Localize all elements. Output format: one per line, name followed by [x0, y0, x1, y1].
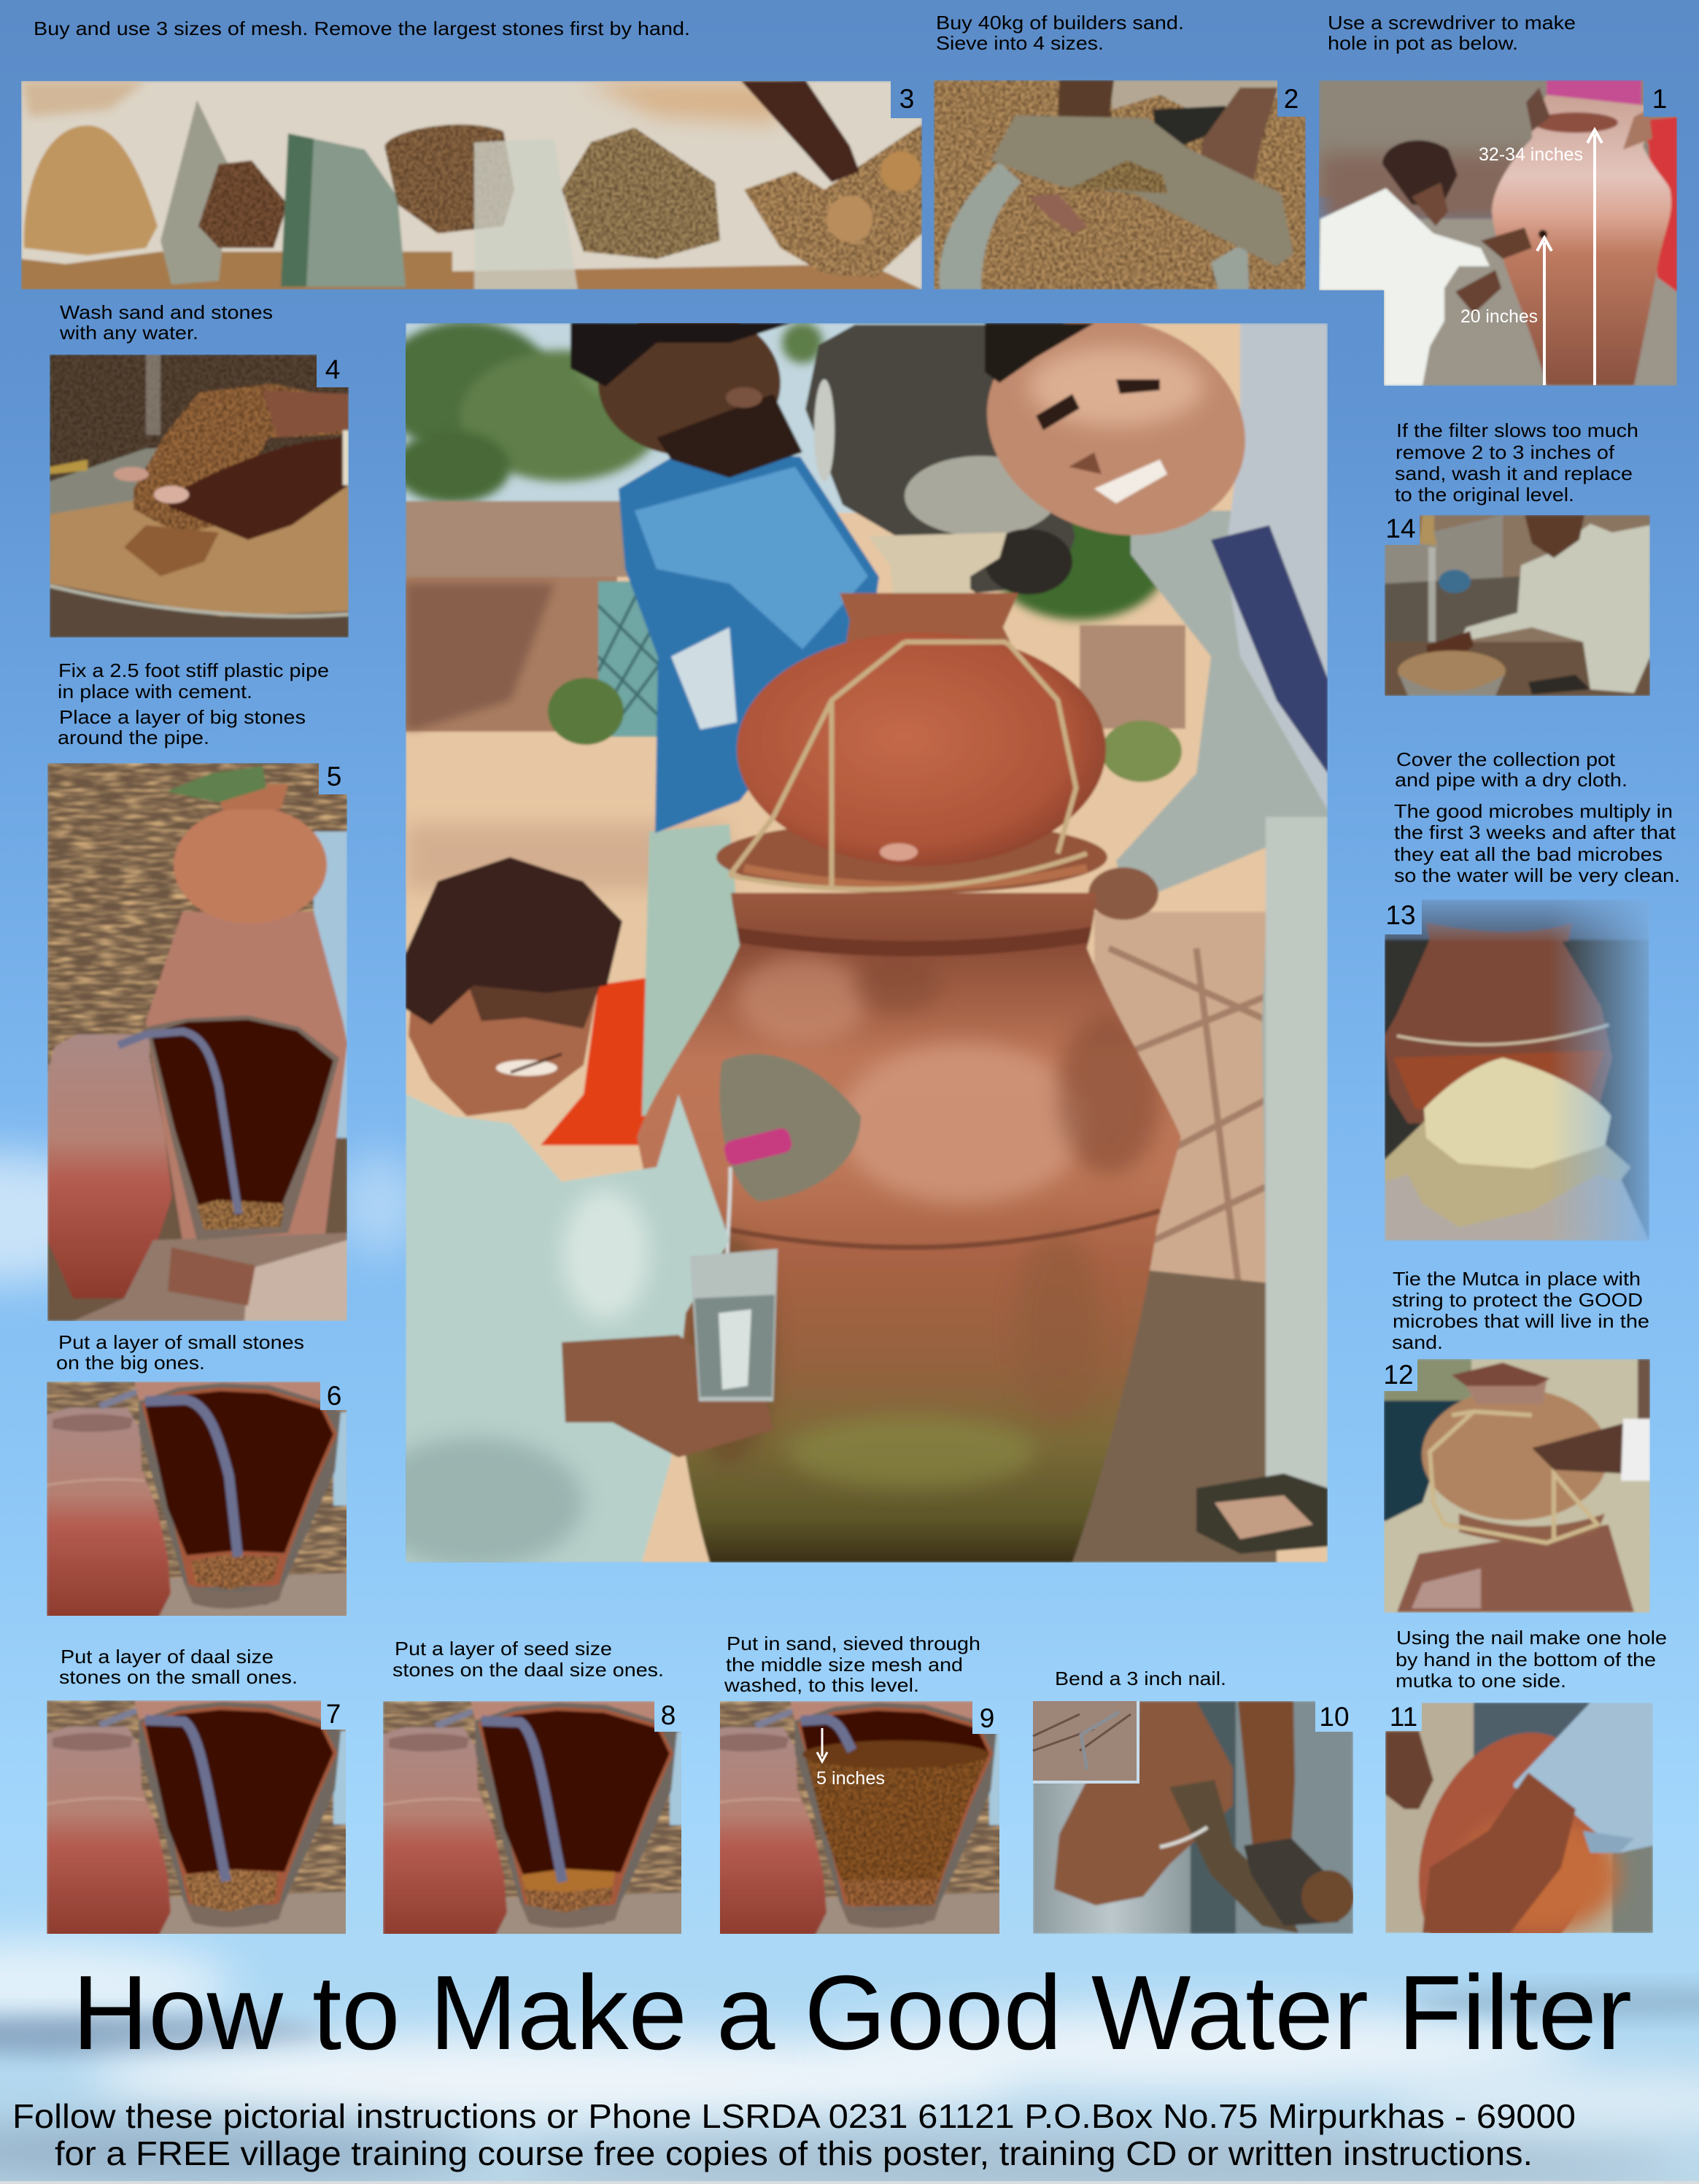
- caption: step 6: [56, 1331, 304, 1374]
- caption: step 13: so the water will be very clean.: [1394, 864, 1680, 886]
- main photo: three men with finished water filter: [365, 285, 1328, 1568]
- caption: step 9: [724, 1633, 980, 1696]
- caption: step 4: with any water.: [59, 322, 198, 344]
- man on the right with scarf: [959, 285, 1328, 1554]
- caption: step 5: Place a layer of big stones: [59, 706, 306, 728]
- caption: step 6: Put a layer of small stones: [58, 1331, 304, 1353]
- caption: step 13: Cover the collection pot: [1396, 748, 1616, 770]
- photo: step 14 washing sand under a tap: [1385, 515, 1650, 696]
- photo: step 10 bending a nail with a hammer: [1033, 1701, 1354, 1934]
- step number 2: 2: [1284, 84, 1299, 114]
- step number 12: 12: [1383, 1360, 1414, 1390]
- orange container: [541, 977, 649, 1145]
- photo: step 12 tying the mutca with string: [1384, 1359, 1650, 1613]
- caption: step 1: [1328, 12, 1576, 54]
- caption: step 7: Put a layer of daal size: [61, 1646, 274, 1668]
- caption: step 13: the first 3 weeks and after that: [1394, 821, 1676, 843]
- caption: step 5: in place with cement.: [58, 681, 252, 702]
- footer: contact instructions: for a FREE village training course free copies of this poster, training CD or written instructions.: [55, 2134, 1533, 2172]
- caption: step 13: [1394, 748, 1680, 886]
- step number 14: 14: [1385, 514, 1416, 543]
- step number 4: 4: [325, 355, 340, 384]
- step number 7: 7: [326, 1699, 341, 1729]
- step number 3: 3: [899, 84, 914, 114]
- caption: step 12: [1392, 1268, 1649, 1353]
- caption: step 9: the middle size mesh and: [726, 1654, 963, 1676]
- step number 8: 8: [661, 1700, 676, 1730]
- step number 6: 6: [327, 1381, 341, 1411]
- caption: step 3: Buy and use 3 sizes of mesh. Remove the largest stones first by hand.: [34, 18, 690, 39]
- step number 11: 11: [1390, 1702, 1417, 1732]
- caption: step 5: [58, 659, 329, 748]
- filter pot with rope and lid: [627, 593, 1189, 1565]
- footer: contact instructions: [12, 2097, 1576, 2172]
- photo: step 5 cutaway pot with pipe and big stones: [47, 763, 347, 1321]
- step number 5: 5: [327, 762, 341, 791]
- step number 1: 1: [1652, 84, 1667, 114]
- caption: step 11: mutka to one side.: [1396, 1670, 1566, 1692]
- photo: step 13 pot covered with cloth: [1385, 899, 1649, 1241]
- steel bowl pouring water: [805, 325, 1075, 598]
- step number 13: 13: [1385, 900, 1416, 930]
- caption: step 5: Fix a 2.5 foot stiff plastic pipe: [58, 659, 329, 681]
- caption: step 14: sand, wash it and replace: [1395, 462, 1633, 484]
- photo: step 7 cutaway pot with daal size stones: [47, 1700, 353, 1941]
- photo: step 3 sieved piles of sand and stones: [21, 81, 922, 290]
- caption: step 11: by hand in the bottom of the: [1396, 1649, 1656, 1670]
- caption: step 2: Sieve into 4 sizes.: [936, 32, 1104, 54]
- step number 10: 10: [1319, 1702, 1350, 1732]
- caption: step 2: [936, 12, 1184, 54]
- caption: step 7: [59, 1646, 298, 1688]
- caption: step 14: to the original level.: [1395, 484, 1574, 506]
- brick building and gate: [406, 501, 1185, 782]
- caption: step 13: The good microbes multiply in: [1394, 800, 1673, 822]
- label: height arrows and measurements on the pot: [1460, 130, 1602, 385]
- caption: step 14: If the filter slows too much: [1396, 419, 1638, 441]
- pink tap and water stream: [722, 1126, 794, 1269]
- label: height arrows and measurements on the pot: 20 inches: [1460, 306, 1538, 327]
- step number 9: 9: [980, 1703, 994, 1733]
- caption: step 12: sand.: [1392, 1331, 1443, 1353]
- label: 5 inches arrow: [816, 1728, 885, 1789]
- caption: step 14: remove 2 to 3 inches of: [1396, 441, 1615, 463]
- caption: step 12: microbes that will live in the: [1393, 1310, 1649, 1332]
- photo: step 6 cutaway pot with small stones: [47, 1382, 353, 1622]
- caption: step 9: Put in sand, sieved through: [727, 1633, 980, 1654]
- ground shadows: [406, 824, 1284, 1563]
- caption: step 8: [392, 1638, 664, 1681]
- caption: step 12: Tie the Mutca in place with: [1393, 1268, 1641, 1290]
- caption: step 13: and pipe with a dry cloth.: [1395, 769, 1628, 791]
- caption: step 2: Buy 40kg of builders sand.: [936, 12, 1184, 34]
- title: How to Make a Good Water Filter: [72, 1953, 1632, 2072]
- caption: step 1: hole in pot as below.: [1328, 32, 1518, 54]
- photo: step 11 making a hole in the mutka: [1385, 1703, 1653, 1999]
- photo: step 2 sieving sand through mesh: [934, 80, 1306, 290]
- photo: step 4 washing sand by hand: [50, 355, 349, 638]
- sky and trees: [379, 321, 1167, 620]
- caption: step 11: Using the nail make one hole: [1396, 1627, 1667, 1649]
- caption: step 13: they eat all the bad microbes: [1394, 843, 1663, 865]
- inset: bent nail on palm: [1033, 1701, 1139, 1784]
- label: height arrows and measurements on the pot: 32-34 inches: [1479, 144, 1583, 165]
- caption: step 8: stones on the daal size ones.: [392, 1659, 664, 1681]
- photo: step 1 making a hole in the pot: [1319, 80, 1677, 386]
- caption: step 14: [1395, 419, 1638, 506]
- caption: step 12: string to protect the GOOD: [1392, 1289, 1643, 1311]
- man in blue at back: [570, 310, 879, 1116]
- footer: contact instructions: Follow these pictorial instructions or Phone LSRDA 0231 61121 P.O.Box No.75 Mirpurkhas - 69000: [12, 2097, 1576, 2135]
- caption: step 6: on the big ones.: [56, 1352, 205, 1374]
- caption: step 4: [59, 301, 273, 344]
- caption: step 7: stones on the small ones.: [59, 1666, 298, 1688]
- caption: step 9: washed, to this level.: [724, 1674, 919, 1696]
- label: 5 inches arrow: 5 inches: [816, 1768, 885, 1789]
- photo: step 8 cutaway pot with seed size stones: [383, 1701, 689, 1942]
- caption: step 4: Wash sand and stones: [60, 301, 273, 323]
- caption: step 11: [1396, 1627, 1667, 1692]
- photo: step 9 cutaway pot filled with sand: [703, 1701, 1009, 1942]
- caption: step 10: Bend a 3 inch nail.: [1055, 1668, 1226, 1689]
- caption: step 5: around the pipe.: [58, 727, 209, 748]
- caption: step 1: Use a screwdriver to make: [1328, 12, 1576, 34]
- seated man holding the glass: [365, 857, 778, 1568]
- caption: step 8: Put a layer of seed size: [395, 1638, 612, 1660]
